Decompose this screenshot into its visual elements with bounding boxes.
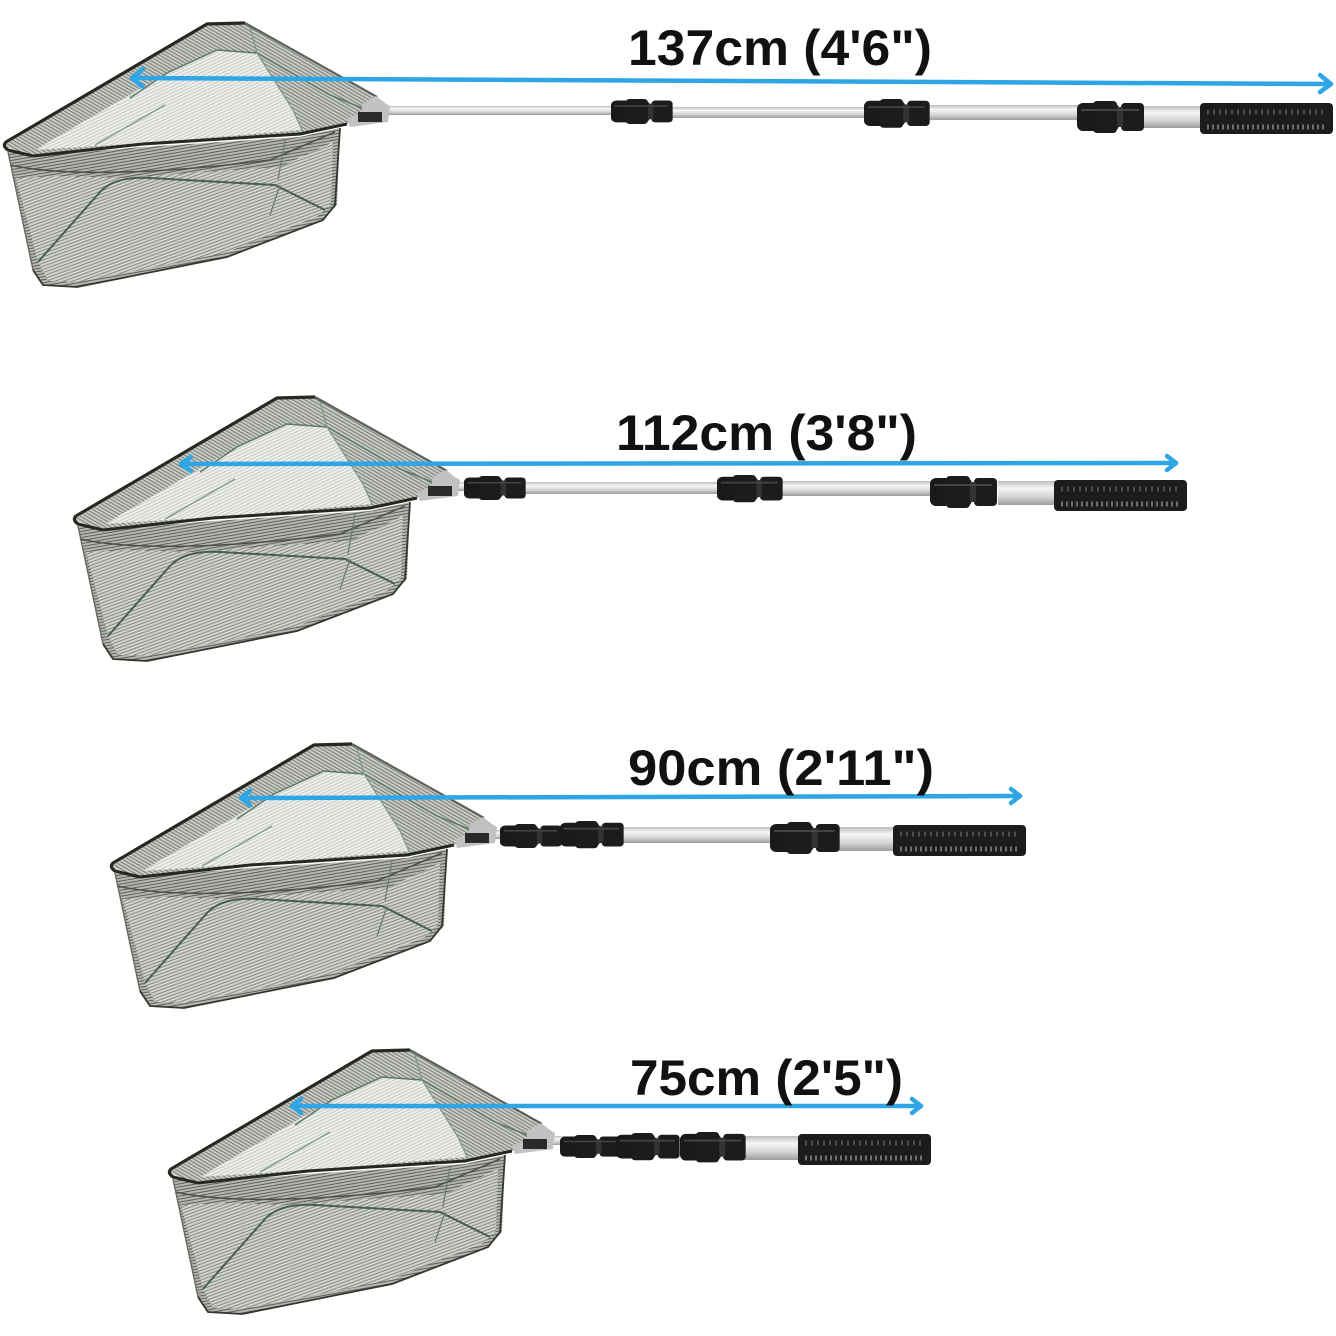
- net head: [110, 744, 497, 1008]
- label: 90cm: 90cm (2'11"): [628, 740, 934, 796]
- label: 75cm: 75cm (2'5"): [630, 1050, 903, 1106]
- net head: [3, 23, 390, 287]
- collars: [560, 1132, 746, 1162]
- net head: [168, 1050, 555, 1314]
- pole segments: [545, 1136, 801, 1160]
- grip: [798, 1134, 931, 1165]
- arrow: 90cm: [241, 789, 1020, 805]
- arrow: 137cm: [132, 69, 1331, 92]
- collars: [611, 99, 1144, 133]
- net 4: fully collapsed 75cm: [168, 1050, 931, 1314]
- net 3: 90cm: [110, 744, 1026, 1008]
- arrow: 112cm: [181, 456, 1176, 471]
- pole segments: [487, 827, 896, 851]
- grip: [893, 825, 1026, 856]
- grip: [1054, 480, 1187, 511]
- arrow: 75cm: [292, 1099, 921, 1113]
- label: 137cm: 137cm (4'6"): [628, 20, 932, 76]
- net 1: fully extended 137cm: [3, 23, 1333, 287]
- collars: [500, 821, 840, 854]
- label: 112cm: 112cm (3'8"): [616, 405, 917, 461]
- net head: [73, 397, 460, 661]
- pole segments: [450, 481, 1056, 505]
- net 2: 112cm: [73, 397, 1187, 661]
- pole segments: [385, 105, 1202, 128]
- grip: [1200, 103, 1333, 134]
- collars: [464, 475, 997, 508]
